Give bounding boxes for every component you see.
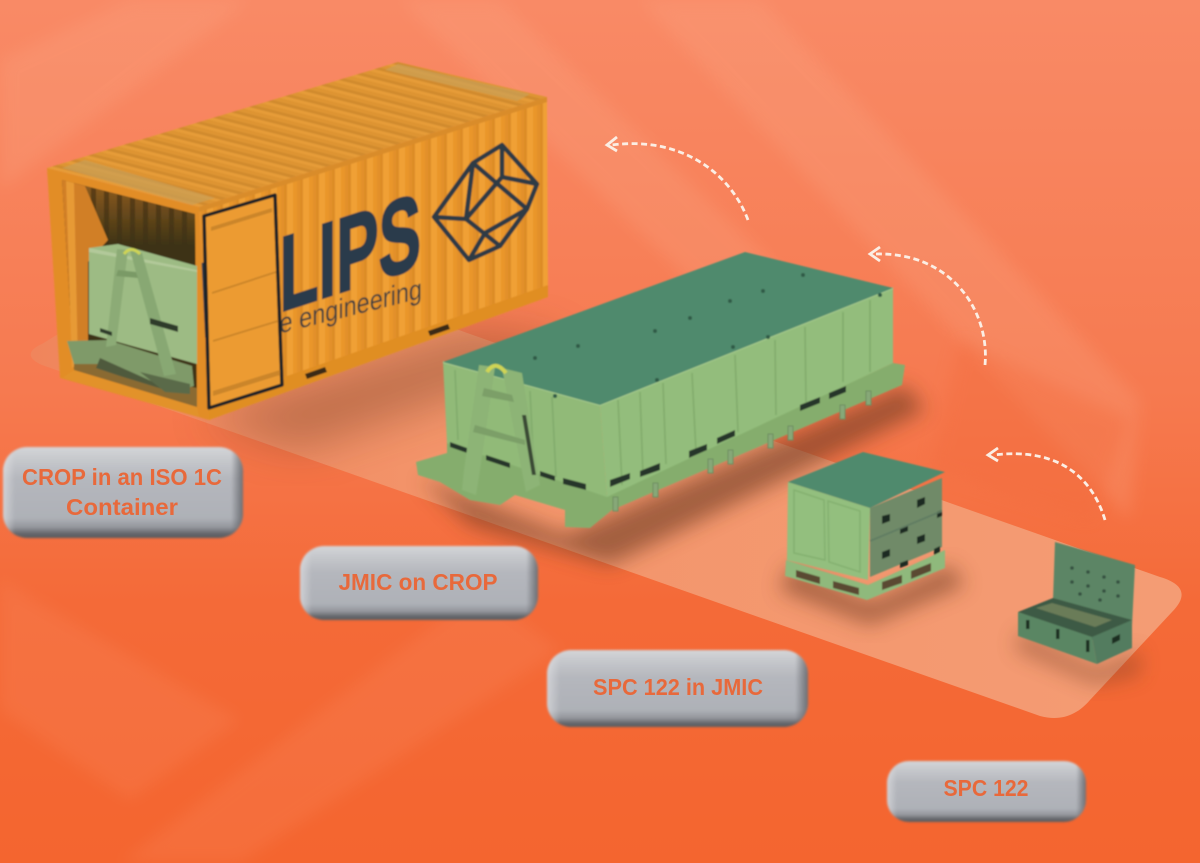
flatrack legs <box>613 391 871 511</box>
shadows on floor <box>200 330 1140 685</box>
label: SPC 122 in JMIC <box>547 650 808 727</box>
flatrack base and forks <box>416 363 905 528</box>
label: CROP in an ISO 1C Container: Container <box>66 494 178 520</box>
JMIC crate <box>785 452 945 600</box>
JMIC base <box>785 550 945 600</box>
flatrack slots <box>450 386 846 490</box>
label: SPC 122: SPC 122 <box>944 775 1028 801</box>
label: SPC 122 in JMIC: SPC 122 in JMIC <box>593 674 763 700</box>
label: JMIC on CROP: JMIC on CROP <box>338 569 498 595</box>
CROP forks and base <box>67 340 194 392</box>
label: JMIC on CROP <box>300 546 538 620</box>
container door <box>204 195 282 408</box>
label: CROP in an ISO 1C Container <box>3 447 243 538</box>
flatrack side panels <box>443 288 893 497</box>
label: CROP in an ISO 1C Container: CROP in an ISO 1C <box>22 464 222 490</box>
logo tagline: innovative engineering <box>187 272 422 363</box>
shipping container with CROP inside <box>47 62 548 420</box>
logo cube mark <box>434 145 537 260</box>
logo wordmark: ECLIPS <box>191 170 421 363</box>
case handles <box>1026 620 1120 652</box>
flatrack top lid <box>443 252 893 405</box>
container roof <box>47 62 547 207</box>
JMIC pallet slots <box>796 563 931 595</box>
flatrack lifting A-frame <box>462 365 540 495</box>
CROP A-frame <box>106 249 128 347</box>
label: SPC 122 <box>887 761 1086 822</box>
container logo <box>187 145 537 363</box>
case lid <box>1053 542 1135 625</box>
arrow: CROP into container <box>607 137 748 220</box>
container side wall <box>199 97 548 420</box>
case interior <box>1018 598 1132 640</box>
container open end <box>47 168 209 420</box>
CROP inside container <box>67 244 197 394</box>
arrow: JMIC onto CROP <box>870 247 985 365</box>
floor band <box>31 240 1182 718</box>
JMIC panel ribs <box>794 490 860 572</box>
SPC 122 open case <box>1018 542 1135 664</box>
arrow: SPC 122 into JMIC <box>988 448 1105 520</box>
JMIC dark side with SPC cases <box>870 478 942 577</box>
JMIC green end panel <box>787 482 870 580</box>
JMIC lid <box>788 452 945 508</box>
CROP flatrack <box>416 252 905 528</box>
case body <box>1018 612 1097 664</box>
